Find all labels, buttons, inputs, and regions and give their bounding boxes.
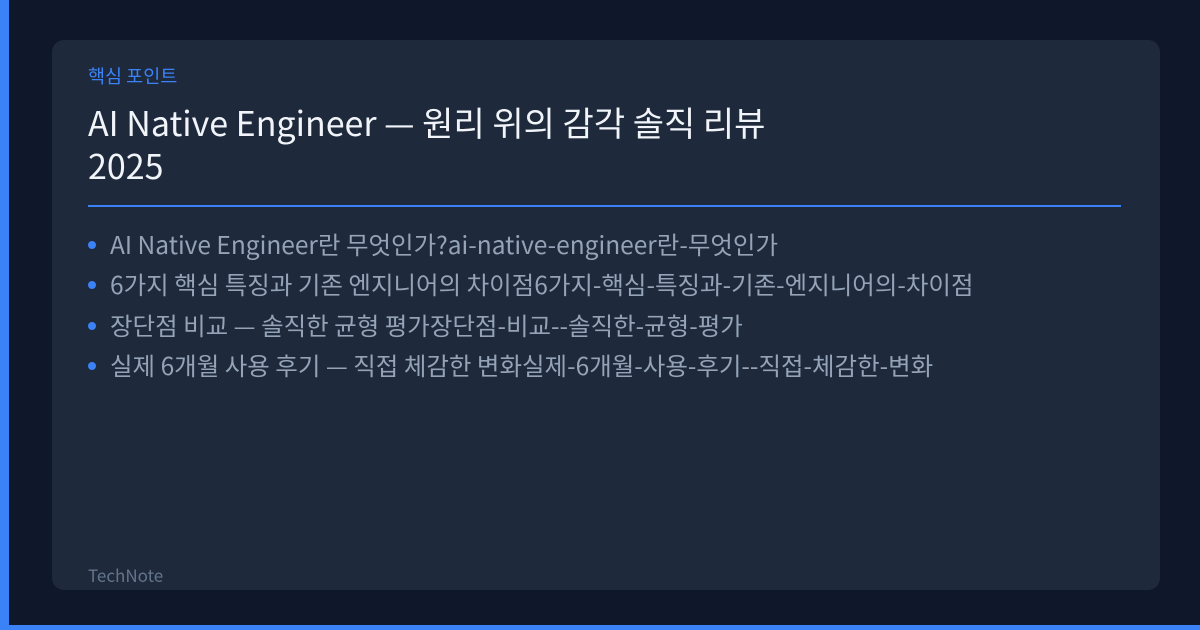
footer brand: TechNote — [88, 562, 163, 587]
title: 2025 — [88, 140, 163, 189]
bullet item 2: 6가지 핵심 특징과 기존 엔지니어의 차이점6가지-핵심-특징과-기존-엔지니어의-차이점 — [110, 267, 974, 302]
title — [88, 97, 765, 189]
tag label: 핵심 포인트 — [88, 63, 177, 89]
left accent bar — [0, 0, 9, 630]
bullet list — [88, 227, 974, 383]
title: AI Native Engineer — 원리 위의 감각 솔직 리뷰 — [88, 97, 765, 146]
bullet item 1: AI Native Engineer란 무엇인가?ai-native-engineer란-무엇인가 — [110, 227, 778, 262]
bullet item 3: 장단점 비교 — 솔직한 균형 평가장단점-비교--솔직한-균형-평가 — [110, 308, 743, 343]
bullet item 4: 실제 6개월 사용 후기 — 직접 체감한 변화실제-6개월-사용-후기--직접-체감한-변화 — [110, 348, 933, 383]
bottom accent bar — [0, 625, 1200, 630]
